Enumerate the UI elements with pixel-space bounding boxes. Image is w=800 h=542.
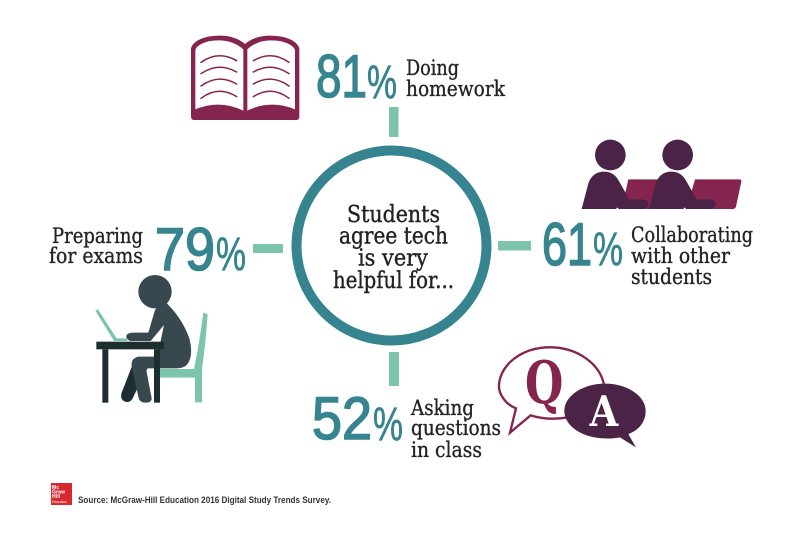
stat: 79% preparing for exams bbox=[49, 216, 246, 283]
central circle with question bbox=[296, 150, 486, 340]
stat: 52% asking questions: % bbox=[373, 397, 403, 450]
icon: Q and A speech bubbles: Q bbox=[525, 347, 563, 417]
stat: 61% collaborating: 61 bbox=[542, 211, 592, 278]
stat: 52% asking questions: Asking bbox=[410, 396, 474, 420]
stat: 52% asking questions bbox=[312, 385, 501, 462]
central circle with question: Students bbox=[347, 202, 440, 228]
stat: 61% collaborating: students bbox=[631, 265, 712, 289]
connector bars bbox=[253, 107, 531, 386]
stat: 81% doing homework: 81 bbox=[316, 43, 367, 110]
source note: Source: McGraw-Hill Education 2016 Digital Study Trends Survey. bbox=[78, 495, 331, 505]
stat: 79% preparing for exams: % bbox=[216, 227, 246, 280]
logo: McGraw-Hill Education bbox=[51, 483, 72, 505]
central circle with question: helpful for... bbox=[333, 268, 454, 294]
logo: McGraw-Hill Education: Graw bbox=[52, 490, 66, 496]
logo: McGraw-Hill Education: Mc bbox=[52, 485, 59, 491]
stat: 79% preparing for exams: for exams bbox=[49, 244, 143, 268]
stat: 79% preparing for exams: 79 bbox=[155, 216, 215, 283]
stat: 52% asking questions: in class bbox=[411, 438, 482, 462]
icon: Q and A speech bubbles bbox=[499, 347, 646, 447]
stat: 81% doing homework: Doing bbox=[406, 56, 459, 80]
stat: 61% collaborating: with other bbox=[631, 244, 731, 268]
icon: Q and A speech bubbles: A bbox=[589, 387, 619, 436]
stat: 81% doing homework bbox=[316, 43, 505, 110]
stat: 61% collaborating: Collaborating bbox=[631, 223, 753, 247]
logo: McGraw-Hill Education: Education bbox=[52, 500, 67, 504]
stat: 79% preparing for exams: Preparing bbox=[52, 224, 143, 248]
icon: open book bbox=[191, 36, 299, 120]
stat: 52% asking questions: questions bbox=[411, 416, 501, 440]
central circle with question: agree tech bbox=[339, 224, 448, 250]
central circle with question: is very bbox=[358, 246, 428, 272]
stat: 52% asking questions: 52 bbox=[312, 385, 372, 452]
icon: two students at laptops bbox=[582, 140, 741, 209]
stat: 61% collaborating: % bbox=[593, 222, 623, 275]
stat: 61% collaborating bbox=[542, 211, 753, 289]
logo: McGraw-Hill Education: Hill bbox=[52, 494, 61, 500]
icon: student at desk with laptop bbox=[95, 275, 208, 403]
stat: 81% doing homework: % bbox=[367, 55, 397, 108]
stat: 81% doing homework: homework bbox=[406, 77, 505, 101]
